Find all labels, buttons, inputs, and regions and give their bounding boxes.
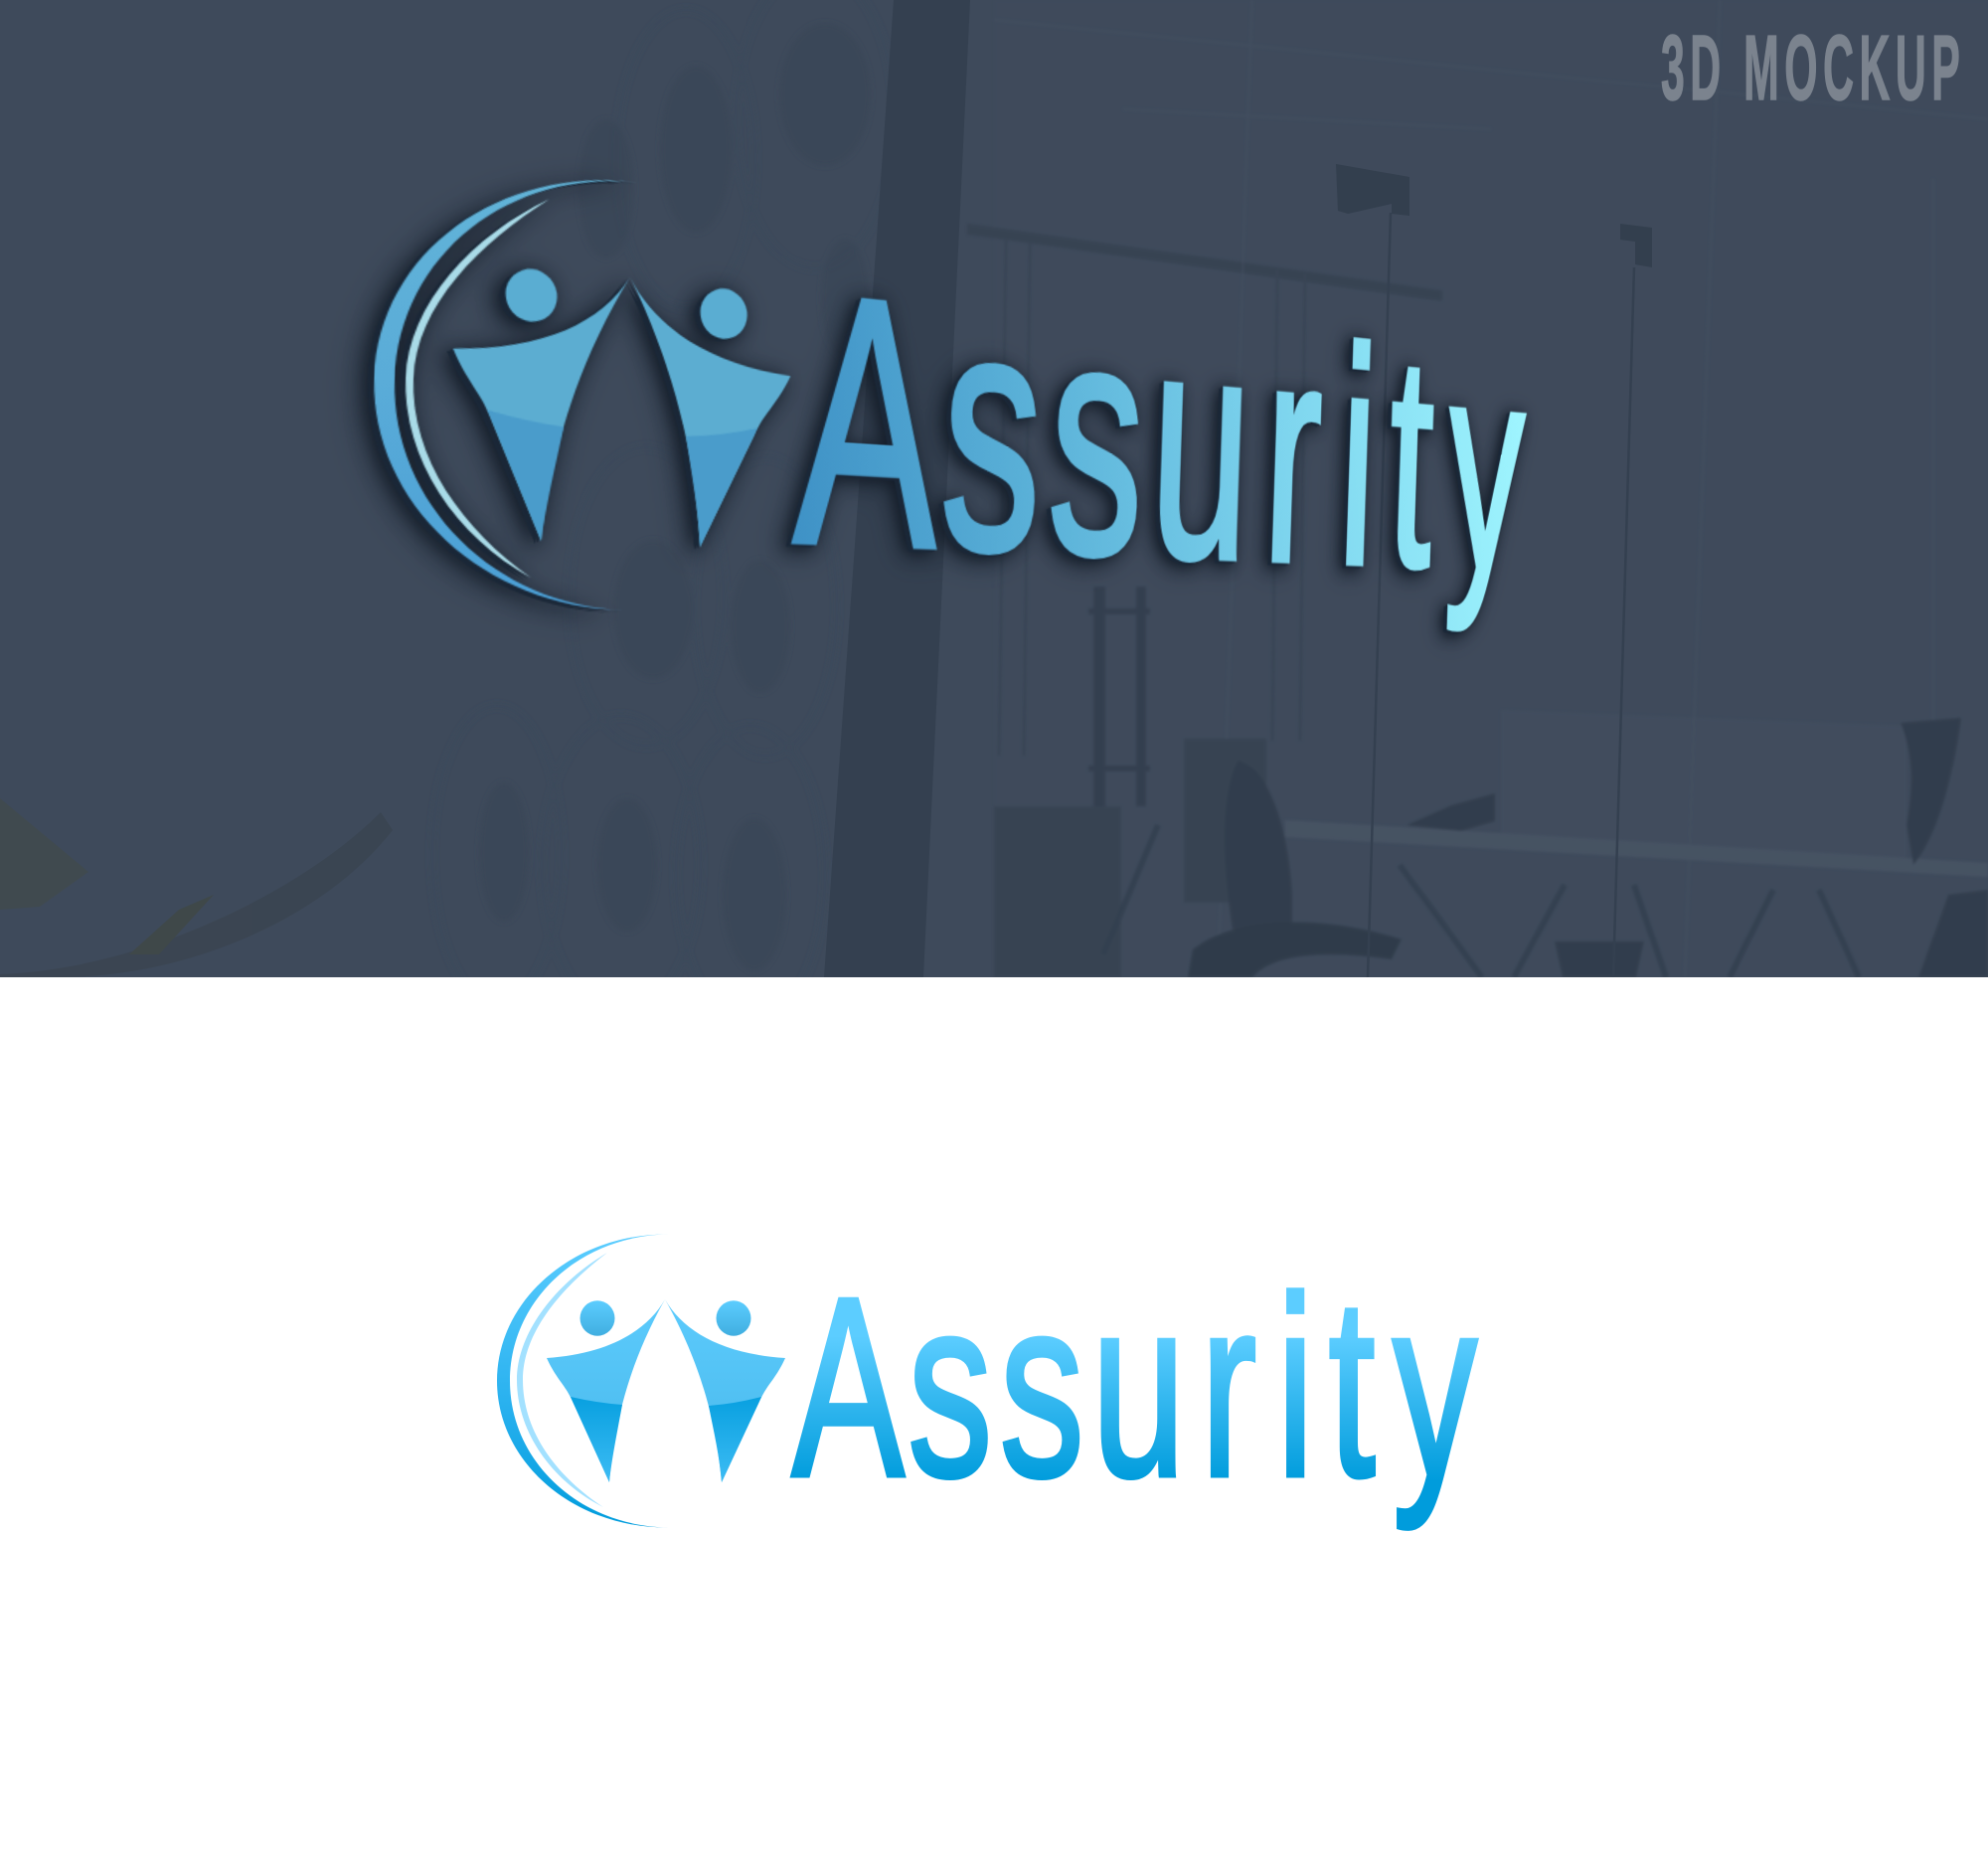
wall background with office reflections [0,0,1988,977]
icon: left head [580,1300,614,1336]
wordmark: Assurity: Assurity [792,1246,1477,1530]
icon: outer crescent [367,150,637,610]
wordmark: Assurity: Assurity [826,227,1956,810]
icon: left figure [547,1299,665,1482]
logo: Assurity 3D sign on the wall [347,177,1956,810]
icon: right head [716,1300,751,1336]
icon: right figure [621,277,793,550]
panel: 3D mockup wall photo [0,0,1988,977]
watermark: 3D MOCKUP: 3D MOCKUP [1661,16,1965,120]
icon: left head [505,266,558,324]
icon: right figure [665,1299,785,1482]
icon: left figure [447,259,630,544]
icon: right head [700,286,748,341]
logo: Assurity flat colour version [497,1235,1479,1531]
icon: thin inner crescent [517,1253,607,1507]
panel: white logo area [0,977,1988,1874]
icon: thin inner crescent [400,183,550,578]
icon: outer crescent [497,1234,668,1528]
